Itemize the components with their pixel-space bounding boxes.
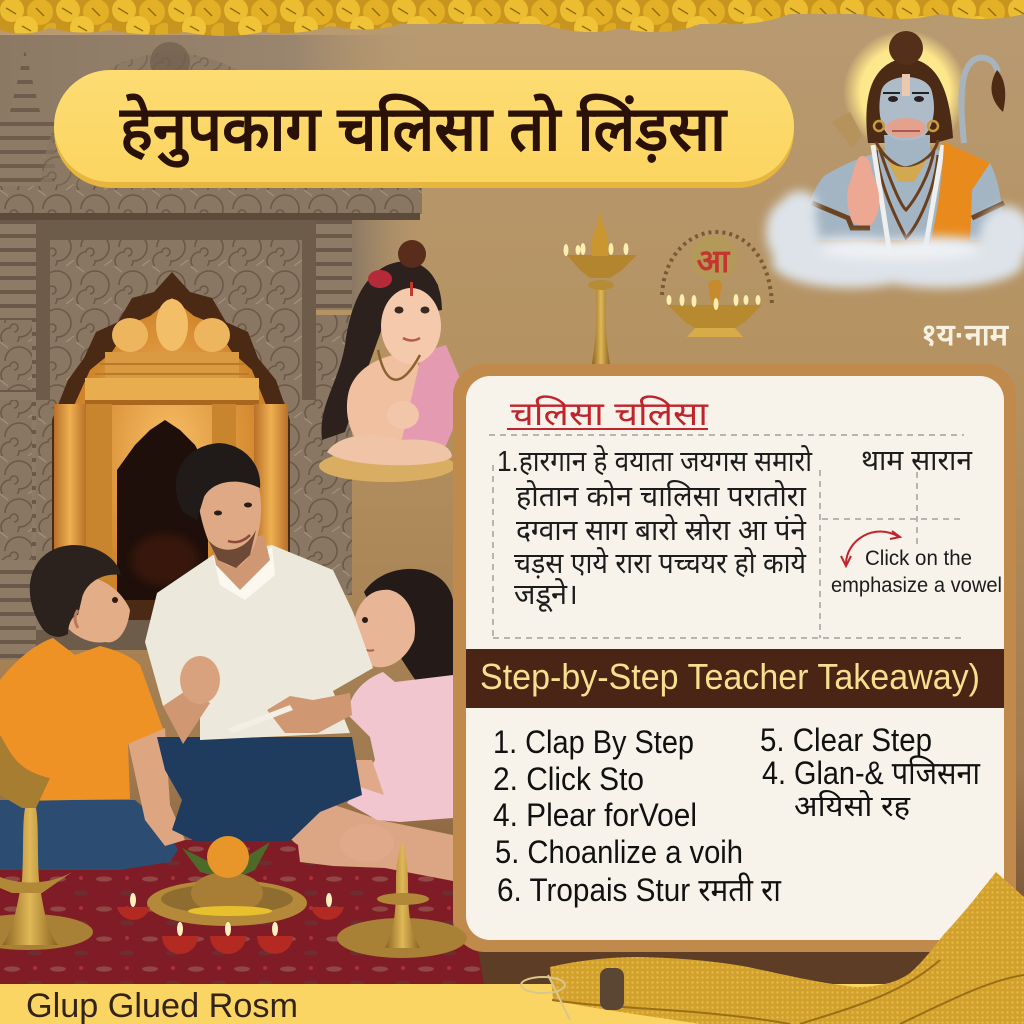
girl legs (287, 801, 453, 881)
tail (961, 58, 1005, 143)
girl face (354, 590, 415, 667)
torso (347, 352, 440, 445)
boy jeans (0, 800, 178, 870)
steps left column: 5. Choanlize a voih (495, 834, 743, 870)
vowel note: emphasize a vowel (831, 574, 1002, 597)
bottom strip (0, 984, 1024, 1024)
raised hand (847, 156, 879, 228)
standing brass lamp (564, 210, 637, 364)
man beard shadow (208, 530, 256, 568)
cloud (766, 191, 1024, 288)
right brass lamp (337, 842, 467, 958)
girl face details (362, 617, 374, 651)
temple illustration (0, 35, 422, 660)
paragraph text: 1.हारगान हे वयाता जयगस समारो (497, 445, 812, 478)
steps right column: अयिसो रह (794, 790, 911, 823)
boy arm (128, 728, 185, 846)
paragraph text: चड़स एाये रारा पच्चयर हो काये (514, 547, 807, 580)
boy shirt (0, 638, 163, 801)
carpet (0, 840, 484, 985)
man left forearm (163, 688, 210, 744)
man shirt (145, 545, 373, 740)
red curved arrow (841, 531, 900, 566)
man face (197, 474, 261, 567)
steps right column: 4. Glan-& पजिसना (762, 755, 981, 791)
deepak bowl with emblem: आ (697, 243, 731, 279)
paragraph text: जडूने। (514, 578, 578, 612)
seat (319, 450, 455, 482)
hair (866, 58, 953, 143)
footer text: Glup Glued Rosm (26, 987, 298, 1024)
halo (843, 30, 967, 154)
vowel note (831, 547, 1002, 597)
body (803, 135, 1004, 240)
paragraph text: होतान कोन चालिसा परातोरा (516, 480, 806, 513)
necklace (378, 350, 420, 380)
boy (0, 545, 185, 870)
earrings (874, 121, 938, 131)
hair (321, 262, 442, 440)
paragraph text: दग्वान साग बारो स्रोरा आ पंने (516, 514, 807, 547)
necklaces (876, 140, 938, 238)
panel heading: चलिसा चलिसा (510, 395, 710, 432)
boy head (62, 576, 130, 643)
legs (327, 435, 452, 465)
steps right column: 5. Clear Step (760, 722, 932, 758)
ribbon fold lines (552, 960, 1024, 1024)
man jeans (157, 737, 362, 841)
man neck (212, 535, 270, 590)
takeaway band (466, 649, 1004, 708)
boy hair (30, 545, 121, 637)
slate (227, 705, 293, 733)
golden shrine arch (52, 272, 290, 620)
girl forearm (310, 753, 384, 795)
armbands (812, 203, 1004, 228)
ribbon eyelet (600, 968, 624, 1010)
face details (394, 282, 430, 340)
man right forearm (267, 693, 352, 733)
takeaway band: Step-by-Step Teacher Takeaway) (480, 656, 980, 697)
boy face details (75, 597, 118, 628)
gold ribbon (521, 872, 1024, 1024)
title text: हेनुपकाग चलिसा तो लिंड़सा (119, 93, 728, 168)
title banner (54, 70, 794, 188)
girl (287, 569, 453, 881)
dashed guide lines (489, 435, 964, 638)
ribbon string (521, 975, 570, 1020)
logo text: १य·नाम (921, 319, 1009, 352)
dark floor strip (460, 945, 1024, 985)
paragraph text (497, 445, 812, 612)
steps left column (493, 724, 782, 908)
steps left column: 1. Clap By Step (493, 724, 694, 760)
steps left column: 2. Click Sto (493, 761, 644, 797)
steps left column: 6. Tropais Stur रमती रा (497, 872, 782, 908)
marigold garland (0, 0, 1024, 36)
deepak bowl with emblem (662, 232, 772, 337)
vowel note: Click on the (865, 547, 972, 570)
pink cloth (400, 345, 460, 448)
left brass lamp (0, 735, 93, 950)
deity figure with halo and cloud (766, 30, 1024, 288)
side label: थाम सारान (861, 445, 973, 477)
man collar (213, 545, 275, 600)
girl hair back (364, 569, 453, 684)
orange dhoti (930, 142, 990, 245)
head (879, 77, 934, 140)
diyas (117, 893, 344, 954)
flower (368, 270, 392, 288)
muzzle (886, 118, 926, 138)
man hair (176, 443, 260, 520)
man left hand (180, 656, 220, 704)
head (381, 288, 441, 364)
arrows quiver (832, 112, 862, 148)
steps left column: 4. Plear forVoel (493, 797, 697, 833)
girl hand on knee (340, 824, 394, 862)
girl dress (347, 672, 453, 822)
main text panel (453, 364, 1016, 952)
steps right column (760, 722, 981, 823)
man face details (214, 502, 252, 542)
man (145, 443, 373, 841)
puja thali with kalash (147, 836, 307, 926)
child sage on lotus seat (319, 240, 460, 482)
hands (387, 401, 419, 429)
